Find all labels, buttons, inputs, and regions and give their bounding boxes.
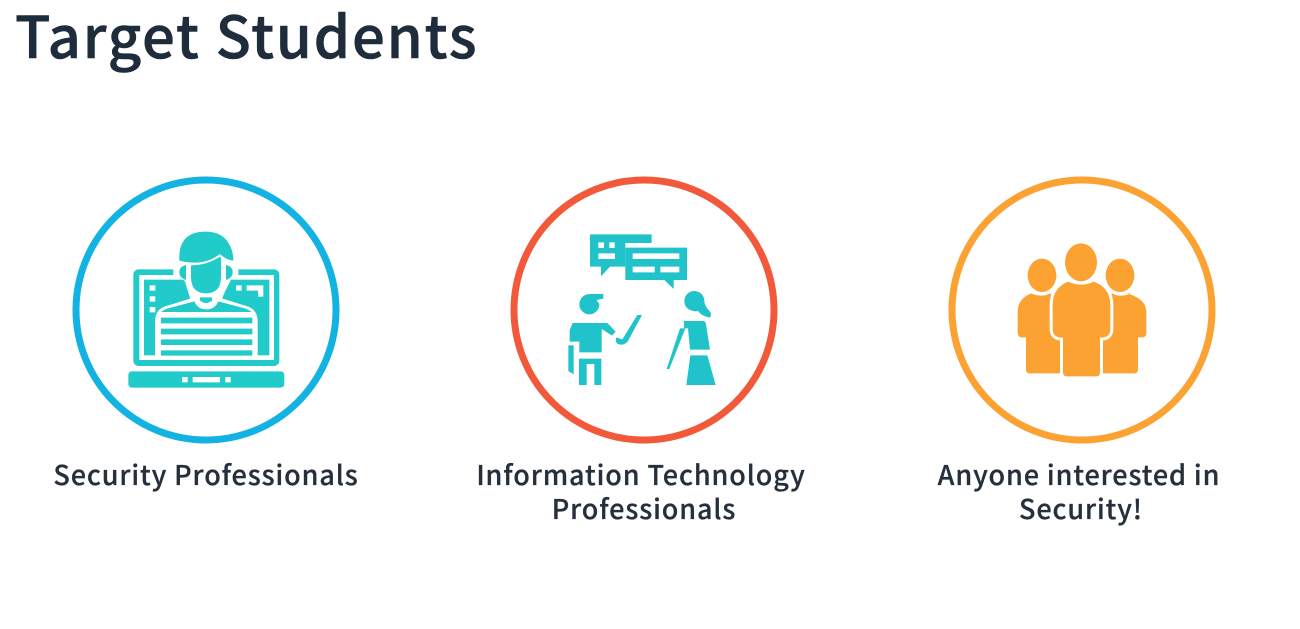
icon: group of people — [1018, 243, 1146, 376]
caption: anyone interested in security: Anyone interested in — [938, 454, 1220, 493]
caption: information technology professionals: Information Technology — [476, 454, 806, 493]
caption: information technology professionals — [476, 454, 806, 527]
caption: information technology professionals: Professionals — [552, 488, 736, 527]
circle: information technology professionals — [514, 180, 774, 440]
circle: security professionals — [76, 180, 336, 440]
caption: anyone interested in security — [938, 454, 1220, 527]
caption: security professionals: Security Professionals — [53, 454, 359, 493]
icon: two people talking — [568, 234, 716, 385]
caption: anyone interested in security: Security! — [1019, 488, 1143, 527]
icon: person on laptop — [128, 232, 284, 388]
circle: anyone interested — [952, 180, 1212, 440]
